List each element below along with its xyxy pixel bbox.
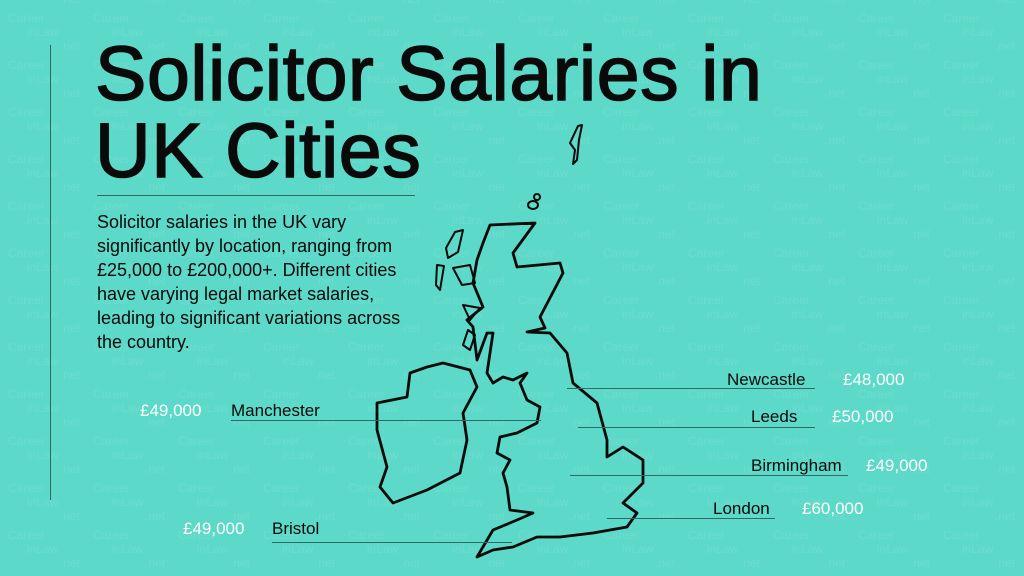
text: Birmingham xyxy=(751,456,842,475)
label: Birmingham xyxy=(570,456,927,476)
title xyxy=(95,31,762,194)
label: London xyxy=(607,499,863,519)
vertical rule xyxy=(50,45,51,500)
text: £49,000 xyxy=(140,401,201,420)
title: Solicitor Salaries in xyxy=(95,31,762,117)
text: Manchester xyxy=(231,401,320,420)
label: Bristol xyxy=(183,519,512,543)
label: Manchester xyxy=(140,401,541,421)
text: Leeds xyxy=(751,407,797,426)
intro text: Solicitor salaries in the UK vary significantly by location, ranging from £25,000 to £200,000+. Different cities have varying legal market salaries, leading to significant variations across the country. xyxy=(97,212,400,352)
text: Bristol xyxy=(272,519,319,538)
label: Leeds xyxy=(578,407,893,428)
label: Newcastle xyxy=(567,370,904,389)
title: UK Cities xyxy=(95,108,421,194)
text: £60,000 xyxy=(802,499,863,518)
text: £48,000 xyxy=(843,370,904,389)
text: £50,000 xyxy=(832,407,893,426)
text: £49,000 xyxy=(866,456,927,475)
text: London xyxy=(713,499,770,518)
text: £49,000 xyxy=(183,519,244,538)
text: Newcastle xyxy=(727,370,805,389)
